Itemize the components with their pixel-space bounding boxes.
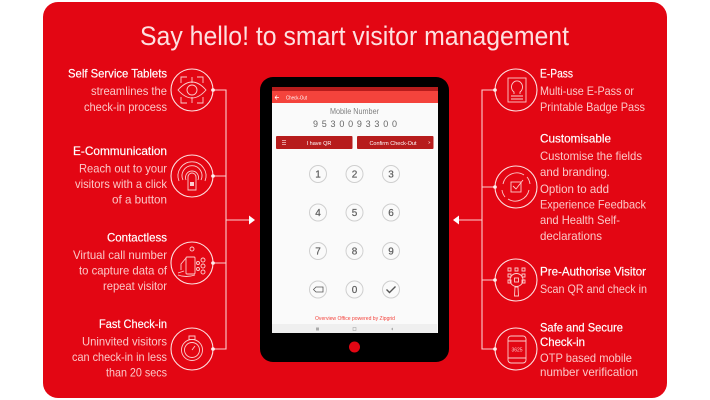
description: number verification [540, 365, 638, 379]
feature: Contactless [73, 230, 213, 293]
android nav bar [272, 324, 437, 333]
heading: E-Pass [540, 66, 573, 80]
heading: Contactless [107, 230, 167, 244]
keypad: 2 [352, 170, 358, 180]
description: Virtual call number [73, 248, 167, 262]
description: Printable Badge Pass [540, 100, 645, 114]
icon: hand holding phone [171, 242, 213, 284]
description: Scan QR and check in [540, 282, 647, 296]
description: repeat visitor [103, 279, 167, 293]
description: Experience Feedback [540, 198, 647, 212]
description [84, 84, 167, 114]
footer text: Overview Office powered by Zipgrid [315, 316, 395, 322]
button: Confirm Check-Out [357, 136, 434, 149]
button: I have QR [276, 136, 352, 149]
description: check-in process [84, 100, 167, 114]
heading: E-Communication [73, 144, 167, 158]
description: Uninvited visitors [82, 334, 167, 348]
description: streamlines the [91, 84, 167, 98]
description: Customise the fields [540, 149, 642, 163]
description [72, 334, 167, 380]
icon: stopwatch [171, 328, 213, 370]
description: Reach out to your [79, 162, 167, 176]
keypad: 3 [388, 170, 394, 180]
description [540, 84, 645, 114]
description [73, 248, 168, 293]
keypad: 8 [352, 246, 358, 258]
feature: Self Service Tablets [68, 66, 213, 114]
keypad: 4 [315, 208, 321, 219]
left connector with arrow [211, 88, 255, 351]
keypad [310, 166, 400, 298]
description [540, 351, 638, 379]
heading: Fast Check-in [99, 317, 167, 331]
icon: checkbox with arrows [495, 166, 537, 208]
description: and branding. [540, 165, 610, 179]
heading: Customisable [540, 132, 611, 146]
description [540, 149, 647, 243]
icon: phone with OTP [495, 328, 537, 370]
description: of a button [112, 192, 167, 206]
description: than 20 secs [106, 366, 167, 380]
button: Confirm Check-Out: Confirm Check-Out [369, 141, 417, 147]
home button [349, 342, 360, 352]
status bar [272, 87, 438, 92]
icon: signal broadcast [171, 155, 213, 197]
feature: Pre-Authorise Visitor [495, 259, 647, 301]
description: can check-in in less [72, 350, 167, 364]
description: to capture data of [79, 264, 168, 278]
heading: Safe and Secure [540, 320, 623, 334]
button: I have QR: I have QR [307, 141, 331, 147]
icon: eye scan [171, 69, 213, 111]
heading [540, 320, 623, 349]
description: and Health Self- [540, 213, 620, 227]
heading: Self Service Tablets [68, 66, 167, 80]
icon: pass card [495, 69, 537, 111]
title: Say hello! to smart visitor management [140, 21, 569, 51]
screen [272, 87, 438, 333]
right connector with arrow [453, 88, 497, 351]
icon: phone with OTP: 3625 [511, 348, 523, 354]
mobile number label: Mobile Number [330, 107, 379, 116]
feature: E-Communication [73, 144, 213, 206]
tablet body [260, 77, 449, 362]
keypad: 5 [352, 208, 358, 219]
description: Multi-use E-Pass or [540, 84, 634, 98]
feature: E-Pass [495, 66, 645, 114]
app header [272, 91, 438, 103]
description: OTP based mobile [540, 351, 632, 365]
heading: Pre-Authorise Visitor [540, 264, 646, 278]
description: declarations [540, 229, 602, 243]
tablet [260, 77, 449, 362]
feature: Fast Check-in [72, 317, 213, 380]
keypad: 7 [315, 246, 321, 258]
description [75, 162, 168, 206]
description: visitors with a click [75, 177, 168, 191]
keypad: 1 [315, 170, 321, 180]
description: Option to add [540, 182, 609, 196]
mobile number digits: 9530093300 [313, 119, 397, 129]
heading: Check-in [540, 335, 585, 349]
keypad: 9 [388, 246, 394, 258]
feature: Safe and Secure Check-in [495, 320, 638, 379]
app header: Check-Out [286, 96, 308, 102]
icon: QR magnifier [495, 259, 537, 301]
keypad: 0 [352, 285, 358, 296]
keypad: 6 [388, 208, 394, 219]
feature: Customisable [495, 132, 647, 243]
